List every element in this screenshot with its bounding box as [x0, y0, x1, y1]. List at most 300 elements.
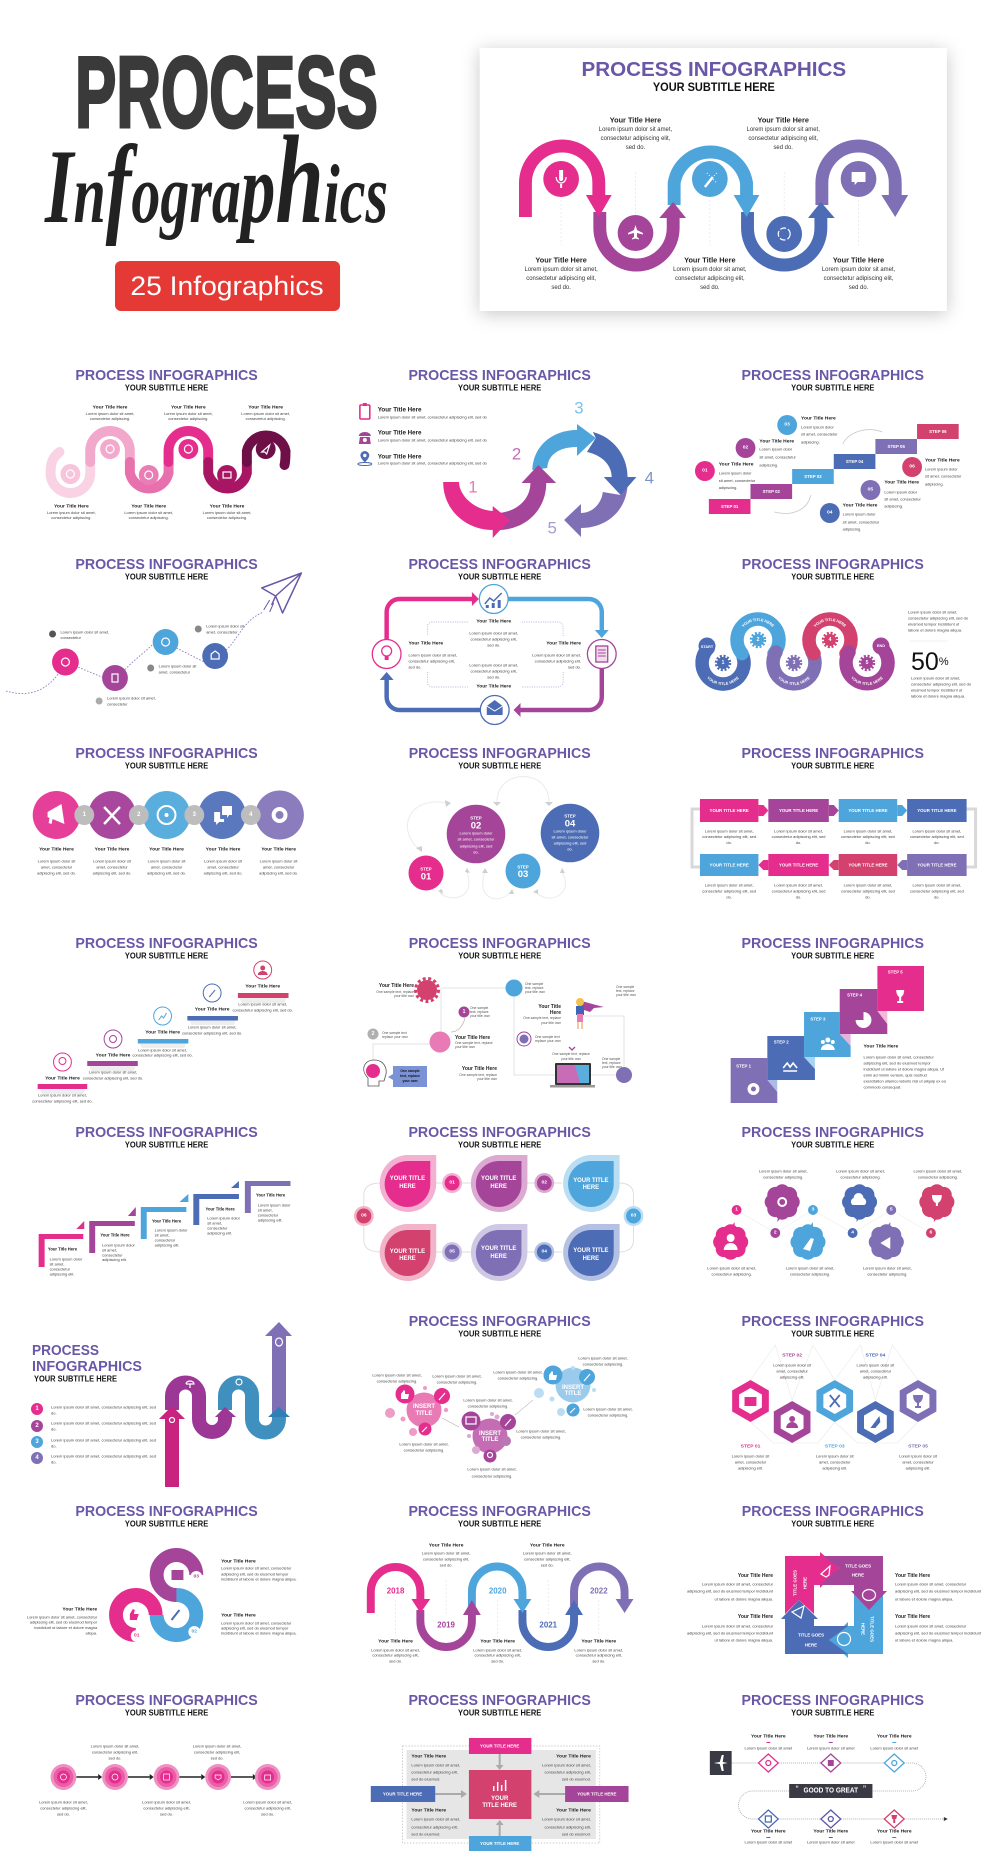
labels: Your Title Here [480, 1638, 515, 1645]
labels: ut labore et dolore magna aliqua. [895, 1596, 953, 1602]
captions: do. [726, 840, 732, 845]
panel 2: circular arrows: PROCESS INFOGRAPHICS [408, 368, 591, 384]
small labels: One sample text, replace [523, 1016, 561, 1020]
labels: Your Title Here [546, 640, 581, 647]
labels: Your Title Here [581, 1638, 616, 1645]
number connectors: 4 [249, 812, 253, 818]
labels: consectetur [102, 1252, 123, 1258]
ring badges and icons: 03 [194, 1573, 199, 1580]
wave rings [702, 619, 888, 684]
panel 24: good to great path [710, 1693, 948, 1845]
labels: Your Title Here [256, 1192, 286, 1198]
panel 2: circular arrows: YOUR SUBTITLE HERE [458, 383, 541, 393]
captions: Lorem ipsum dolor sit amet, [193, 1743, 241, 1749]
flow nodes: 1 [463, 1009, 466, 1015]
captions: Lorem ipsum dolor sit amet, [863, 1265, 912, 1271]
labels: STEP 02 [782, 1352, 802, 1359]
panel 22: pink concentric timeline: YOUR SUBTITLE HERE [125, 1708, 208, 1718]
labels: Lorem ipsum dolor sit amet, [241, 411, 290, 416]
panel 12: stepped squares: PROCESS INFOGRAPHICS [742, 936, 924, 952]
labels: sed do eiusmod. [562, 1831, 591, 1837]
gears: 5 [866, 660, 869, 666]
drops: HERE [399, 1184, 416, 1190]
labels: Lorem ipsum dolor [102, 1242, 136, 1248]
labels: adipiscing elit. [155, 1242, 179, 1248]
labels: Your Title Here [149, 846, 184, 853]
labels: Lorem ipsum dolor [801, 424, 834, 430]
boxes: YOUR TITLE HERE [917, 862, 957, 868]
small labels: replace your own [535, 1039, 561, 1043]
step circles [52, 629, 228, 691]
captions: consectetur adipiscing elit, [92, 1749, 138, 1755]
list icons and text: Your Title Here [378, 406, 422, 414]
captions: Lorem ipsum dolor sit amet, [759, 1168, 808, 1174]
step numbers: 2 [512, 444, 521, 464]
panel heading: YOUR SUBTITLE HERE [34, 1374, 118, 1384]
labels: adipiscing. [925, 481, 944, 487]
paper plane [262, 573, 301, 613]
labels: adipiscing elit. [863, 1374, 888, 1380]
hero text labels: sed do. [849, 285, 869, 291]
captions: do. [726, 894, 732, 900]
labels: sed do. [491, 1658, 504, 1664]
labels: Lorem ipsum dolor [155, 1227, 188, 1233]
purple cluster [462, 1412, 516, 1462]
panel 7: five circles: YOUR SUBTITLE HERE [125, 761, 208, 771]
captions: consectetur adipiscing. [404, 1448, 444, 1452]
small labels: One sample text [535, 1035, 560, 1039]
hero text labels: sed do. [551, 285, 571, 291]
labels: consectetur adipiscing elit, [576, 1652, 622, 1658]
years [387, 1586, 608, 1630]
pink cluster: INSERT [413, 1404, 435, 1410]
captions: Lorem ipsum dolor sit amet, [707, 1265, 756, 1271]
labels: Lorem ipsum dolor sit [816, 1453, 855, 1459]
wave labels: YOUR TITLE HERE [852, 676, 883, 686]
list icons and text: Your Title Here [378, 429, 422, 437]
labels: sed do. [487, 642, 500, 648]
captions: Lorem ipsum dolor sit amet, [516, 1428, 566, 1434]
panel 4: paper plane journey: PROCESS INFOGRAPHICS [75, 557, 258, 573]
small labels: One sample text, replace [455, 1041, 493, 1045]
panel 4: paper plane journey: YOUR SUBTITLE HERE [125, 572, 208, 582]
labels: Lorem ipsum dolor sit amet, [138, 1047, 187, 1053]
small labels: Your Title Here [462, 1066, 497, 1072]
panel 1: pink S wave: PROCESS INFOGRAPHICS [75, 368, 258, 384]
step bars: STEP 02 [763, 489, 781, 494]
panel 15: cloud icons: PROCESS INFOGRAPHICS [742, 1125, 924, 1141]
years: 2021 [539, 1620, 558, 1630]
blue cluster: TITLE [565, 1391, 581, 1397]
small labels [376, 982, 636, 1081]
captions: consectetur adipiscing. [763, 1174, 803, 1180]
labels: incididunt ut labore et dolore magna [34, 1625, 98, 1630]
side text and 50 percent stat: Lorem ipsum dolor sit amet, [908, 610, 957, 614]
title: Infographics script: Infographics [44, 111, 388, 250]
labels: Lorem ipsum dolor sit [206, 623, 245, 629]
labels: Your Title Here [801, 415, 836, 422]
square arrows [781, 1552, 887, 1658]
panel heading: PROCESS [32, 1343, 99, 1359]
captions: Lorem ipsum dolor sit amet, [372, 1372, 422, 1378]
square arrows: TITLE GOES [870, 1616, 874, 1642]
labels: Your Title Here [96, 1052, 131, 1059]
labels: sit amet, consectetur [884, 496, 921, 502]
labels: sed do. [592, 1658, 605, 1664]
hub boxes: YOUR TITLE HERE [577, 1791, 617, 1797]
circles: 04 [565, 818, 576, 830]
labels: amet, consectetur [776, 1368, 809, 1374]
labels: consectetur adipiscing elit, sed do. [182, 1030, 242, 1036]
drops: YOUR TITLE [481, 1176, 516, 1182]
number circles: 03 [784, 421, 790, 428]
hub boxes: YOUR TITLE HERE [480, 1841, 519, 1846]
boxes: YOUR TITLE HERE [710, 862, 749, 868]
labels: Your Title Here [261, 846, 296, 853]
panel 21: square arrow cycle: PROCESS INFOGRAPHICS [742, 1504, 924, 1520]
captions: consectetur adipiscing. [468, 1404, 508, 1408]
labels: Lorem ipsum dolor [719, 470, 752, 476]
panel 14: teardrops [354, 1125, 643, 1281]
loop icon circles [372, 584, 616, 724]
hero text labels: Lorem ipsum dolor sit amet, [599, 127, 672, 133]
drops: HERE [399, 1256, 416, 1262]
step numbers: 1 [468, 477, 478, 497]
labels: consectetur adipiscing elit, [535, 658, 581, 664]
captions: Lorem ipsum dolor sit amet, [493, 1370, 543, 1374]
labels: consectetur adipiscing elit, [545, 1769, 591, 1775]
captions: Lorem ipsum dolor sit amet, [578, 1356, 628, 1360]
captions: consectetur adipiscing elit, sed [841, 834, 895, 839]
circles: STEP [517, 864, 529, 870]
labels: Lorem ipsum dolor sit [38, 858, 76, 864]
panel 11: flow network [364, 936, 636, 1088]
description: adipiscing elit, sed do eiusmod tempor [864, 1060, 931, 1066]
panel 20: year timeline wave: PROCESS INFOGRAPHICS [408, 1504, 591, 1520]
small labels: your title own [561, 1057, 581, 1061]
labels: Lorem ipsum dolor sit amet, [542, 1816, 591, 1822]
labels: adipiscing elit. [258, 1217, 283, 1223]
labels: Your Title Here [877, 1828, 912, 1835]
labels: Lorem ipsum dolor sit [204, 858, 243, 864]
labels: Lorem ipsum dolor [258, 1202, 291, 1208]
labels: Lorem ipsum dolor sit [899, 1453, 938, 1459]
labels: Your Title Here [751, 1733, 786, 1740]
hero text labels: Your Title Here [757, 115, 809, 125]
blue cluster: INSERT [562, 1385, 584, 1391]
labels: ut labore et dolore magna aliqua. [715, 1638, 773, 1642]
labels: amet, consectetur [151, 864, 183, 870]
labels: consectetur [107, 701, 128, 707]
small labels: your title own [541, 1021, 561, 1025]
panel 9: two-row process boxes [692, 746, 976, 900]
labels: Lorem ipsum dolor sit amet, [542, 1762, 591, 1768]
list icons and text [358, 403, 488, 466]
step bars: STEP 05 [888, 444, 905, 449]
wave path [51, 431, 286, 493]
labels: adipiscing. [884, 503, 903, 509]
brain head and callout: your own [402, 1079, 418, 1083]
labels: Your Title Here [210, 503, 245, 510]
number connectors: 1 [83, 812, 87, 818]
labels: adipiscing elit, sed do. [37, 870, 76, 876]
panel 21: square arrow cycle: YOUR SUBTITLE HERE [791, 1520, 875, 1528]
number connectors: 3 [193, 812, 197, 818]
panel 14: teardrops: PROCESS INFOGRAPHICS [408, 1125, 591, 1141]
panel 12: stepped squares: YOUR SUBTITLE HERE [791, 951, 874, 961]
labels [408, 618, 581, 690]
labels: Lorem ipsum dolor sit amet, [469, 630, 518, 636]
captions: Lorem ipsum dolor sit amet, [912, 828, 961, 834]
panel 13: ascending L shapes: YOUR SUBTITLE HERE [125, 1140, 208, 1150]
small labels: text, replace [470, 1010, 489, 1014]
labels: consectetur adipiscing elit, sed do. [132, 1052, 193, 1058]
labels: ut labore et dolore magna aliqua. [895, 1638, 953, 1642]
boxes: YOUR TITLE HERE [848, 808, 888, 813]
labels: ut labore et dolore magna aliqua. [715, 1596, 773, 1602]
labels: adipiscing elit, sed do eiusmod tempor [30, 1619, 98, 1625]
labels: Your Title Here [206, 1206, 235, 1212]
labels: consectetur adipiscing elit, sed do. [233, 1007, 293, 1013]
labels [411, 1753, 591, 1837]
number dots: 3 [812, 1206, 815, 1213]
steps: STEP 5 [888, 969, 903, 975]
labels: consectetur adipiscing. [129, 515, 169, 520]
hub boxes [371, 1738, 629, 1851]
description: incididunt ut labore et dolore magna aliqua. Ut [864, 1066, 945, 1072]
panel 6: gear wave with 50 percent [695, 557, 972, 698]
steps: STEP 3 [810, 1016, 826, 1022]
labels: Your Title Here [895, 1573, 930, 1579]
rings [116, 1555, 196, 1635]
panel 22: pink concentric timeline [39, 1693, 292, 1817]
labels: Your Title Here [131, 503, 166, 510]
labels: adipiscing elit. [738, 1465, 763, 1471]
number circles: 04 [827, 509, 833, 516]
panel 18: hexagons [732, 1314, 938, 1471]
labels: Your Title Here [411, 1807, 446, 1814]
numbered list: do. [51, 1460, 57, 1464]
labels: Lorem ipsum dolor sit amet, consectetur [221, 1620, 292, 1626]
labels: Lorem ipsum dolor sit amet, [523, 1550, 572, 1556]
hero text labels: sed do. [700, 285, 720, 291]
labels: adipiscing. [843, 526, 861, 532]
labels: Your Title Here [206, 846, 241, 853]
side text and 50 percent stat: consectetur adipiscing elit, sed do [911, 682, 972, 686]
captions: consectetur adipiscing elit, [143, 1805, 190, 1811]
labels: Lorem ipsum dolor sit amet, consectetur [702, 1624, 774, 1628]
captions: consectetur adipiscing. [790, 1271, 830, 1277]
hub boxes: YOUR TITLE HERE [480, 1743, 519, 1749]
captions: consectetur adipiscing elit, [194, 1749, 240, 1755]
labels: amet, consectetur [41, 864, 73, 870]
wave labels [701, 618, 885, 686]
laptop [550, 1063, 595, 1088]
inner dotted frame [427, 622, 563, 687]
hero text labels: Your Title Here [833, 255, 884, 265]
large circles [33, 790, 304, 840]
ring badges and icons: 02 [192, 1628, 197, 1635]
labels: Your Title Here [738, 1573, 773, 1579]
captions: consectetur adipiscing. [472, 1474, 512, 1478]
ring badges and icons: 01 [134, 1632, 140, 1639]
labels: Your Title Here [884, 479, 919, 486]
labels: Lorem ipsum dolor sit amet, [38, 1092, 87, 1098]
labels: Lorem ipsum dolor [759, 446, 793, 452]
drops: HERE [583, 1185, 599, 1191]
hero text labels: sed do. [626, 145, 646, 151]
captions: Lorem ipsum dolor sit amet, [913, 1168, 962, 1174]
panel 11: flow network: PROCESS INFOGRAPHICS [409, 936, 591, 952]
purple cluster: INSERT [479, 1431, 501, 1437]
labels: amet, consectetur [159, 669, 191, 675]
captions: Lorem ipsum dolor sit amet, [705, 828, 754, 834]
drops: YOUR TITLE [573, 1248, 609, 1254]
circles: Lorem ipsum dolor [459, 830, 493, 836]
small labels: your title own [525, 990, 545, 994]
L shapes [39, 1181, 290, 1267]
panel 11: flow network: YOUR SUBTITLE HERE [458, 952, 542, 960]
labels: amet, consectetur [735, 1459, 767, 1465]
labels: Your Title Here [45, 1075, 80, 1082]
labels: consectetur [155, 1237, 176, 1243]
drops: HERE [583, 1256, 599, 1262]
labels: STEP 01 [741, 1443, 761, 1450]
labels: consectetur [60, 635, 82, 640]
captions: Lorem ipsum dolor sit amet, [142, 1799, 191, 1805]
woman with cape [576, 998, 604, 1029]
wave [371, 1566, 625, 1647]
panel 7: five circles: PROCESS INFOGRAPHICS [75, 746, 258, 762]
circles: sit amet, consectetur [552, 834, 589, 840]
side text and 50 percent stat: labore et dolore magna aliqua. [911, 694, 965, 698]
panel 21: square arrow cycle [687, 1504, 982, 1658]
labels: Your Title Here [877, 1733, 912, 1740]
labels: STEP 03 [825, 1443, 845, 1450]
labels: consectetur adipiscing elit, [423, 1556, 469, 1562]
panel 14: teardrops: YOUR SUBTITLE HERE [458, 1140, 541, 1150]
labels: Your Title Here [530, 1542, 565, 1549]
labels: sit amet, [155, 1232, 170, 1238]
description: exercitation ullamco laboris nisi ut aliquip ex ea [864, 1078, 947, 1084]
panel 10: ascending platforms [32, 936, 293, 1104]
small labels: One sample [525, 982, 543, 986]
labels: Lorem ipsum dolor sit [260, 858, 298, 864]
labels: adipiscing elit, sed do eiusmod tempor incididunt [687, 1630, 774, 1636]
clouds [713, 1184, 954, 1260]
labels [37, 846, 298, 876]
hero text labels: consectetur adipiscing elit, [526, 276, 596, 282]
panel 15: cloud icons [707, 1125, 962, 1277]
labels: adipiscing. [719, 485, 737, 490]
number dots: 1 [735, 1206, 738, 1213]
labels: sit amet, consectetur [759, 454, 797, 460]
badge: 25 Infographics [115, 261, 340, 311]
circles: do. [567, 846, 573, 852]
side text and 50 percent stat: 50% [911, 648, 949, 676]
boxes: YOUR TITLE HERE [779, 862, 818, 868]
labels: Lorem ipsum dolor sit amet, consectetur [702, 1582, 774, 1586]
labels: Lorem ipsum dolor sit [773, 1362, 812, 1368]
labels [49, 623, 245, 707]
labels [719, 415, 962, 532]
captions: Lorem ipsum dolor sit amet, [774, 882, 823, 888]
captions: Lorem ipsum dolor sit amet, [243, 1799, 292, 1805]
boxes: YOUR TITLE HERE [917, 808, 957, 813]
number circles: 06 [909, 463, 915, 470]
circles: 02 [471, 820, 481, 832]
labels: Your Title Here [429, 1542, 464, 1549]
steps: STEP 4 [847, 992, 863, 998]
numbered list: do. [51, 1410, 57, 1416]
side text and 50 percent stat: consectetur adipiscing elit, sed do [908, 616, 969, 620]
captions [39, 1743, 292, 1817]
hero text labels: Lorem ipsum dolor sit amet, [747, 127, 820, 133]
square arrows: HERE [852, 1572, 864, 1578]
panel 8: step circles with curved arrows: PROCESS INFOGRAPHICS [409, 746, 591, 762]
labels: Lorem ipsum dolor sit [93, 858, 132, 864]
side text and 50 percent stat: Lorem ipsum dolor sit amet, [911, 676, 960, 680]
panel 19: spiral rings: PROCESS INFOGRAPHICS [75, 1504, 258, 1520]
labels: consectetur adipiscing. [168, 416, 208, 421]
panel 17: bubble clusters [372, 1314, 633, 1478]
panel 1: pink S wave [47, 368, 290, 520]
panel 6: gear wave with 50 percent: YOUR SUBTITLE HERE [791, 572, 875, 582]
steps: STEP 1 [736, 1063, 752, 1069]
panel 4: paper plane journey [6, 557, 301, 707]
small labels: replace your own [382, 1035, 408, 1039]
labels: consectetur adipiscing elit, [524, 1556, 570, 1562]
small labels: Your Title Here [379, 983, 414, 989]
labels: sed do. [487, 674, 500, 680]
hero text labels: Your Title Here [610, 115, 661, 125]
square arrows: TITLE GOES [798, 1632, 824, 1638]
labels: Your Title Here [813, 1828, 848, 1835]
numbered list: Lorem ipsum dolor sit amet, consectetur adipiscing elit, sed [51, 1404, 156, 1410]
small labels: One sample text, replace [376, 990, 414, 994]
captions: consectetur adipiscing. [521, 1434, 561, 1440]
labels: consectetur adipiscing elit, [545, 1824, 591, 1830]
labels: adipiscing. [801, 439, 820, 445]
labels: sed do eiusmod. [411, 1831, 440, 1837]
small labels: One sample [470, 1006, 488, 1010]
brain head and callout [364, 1060, 427, 1087]
panel 17: bubble clusters: PROCESS INFOGRAPHICS [409, 1314, 591, 1330]
labels: consectetur adipiscing elit, [372, 1652, 419, 1658]
panel 24: good to great path: PROCESS INFOGRAPHICS [742, 1693, 924, 1709]
labels: Lorem ipsum dolor [925, 466, 958, 472]
panel 19: spiral rings [27, 1504, 297, 1642]
labels [32, 983, 293, 1104]
gears: 1 [722, 660, 725, 666]
step bars [709, 424, 959, 514]
panel: hero process infographic [480, 48, 947, 311]
captions: consectetur adipiscing. [377, 1378, 417, 1384]
panel 1: pink S wave: YOUR SUBTITLE HERE [125, 383, 208, 393]
panel 23: central hub boxes: PROCESS INFOGRAPHICS [408, 1693, 591, 1709]
labels: adipiscing elit. [906, 1465, 930, 1471]
labels: sit amet, consectetur [925, 473, 962, 479]
wave labels: YOUR TITLE HERE [778, 676, 810, 686]
panel 3: stair steps [695, 368, 962, 532]
arrows [435, 1754, 565, 1836]
hero text labels [524, 115, 896, 291]
captions: Lorem ipsum dolor sit amet, [432, 1374, 482, 1378]
captions: sed do. [57, 1811, 70, 1817]
labels: Your Title Here [751, 1828, 786, 1835]
labels: Your Title Here [93, 404, 128, 411]
blue cluster [534, 1366, 596, 1416]
